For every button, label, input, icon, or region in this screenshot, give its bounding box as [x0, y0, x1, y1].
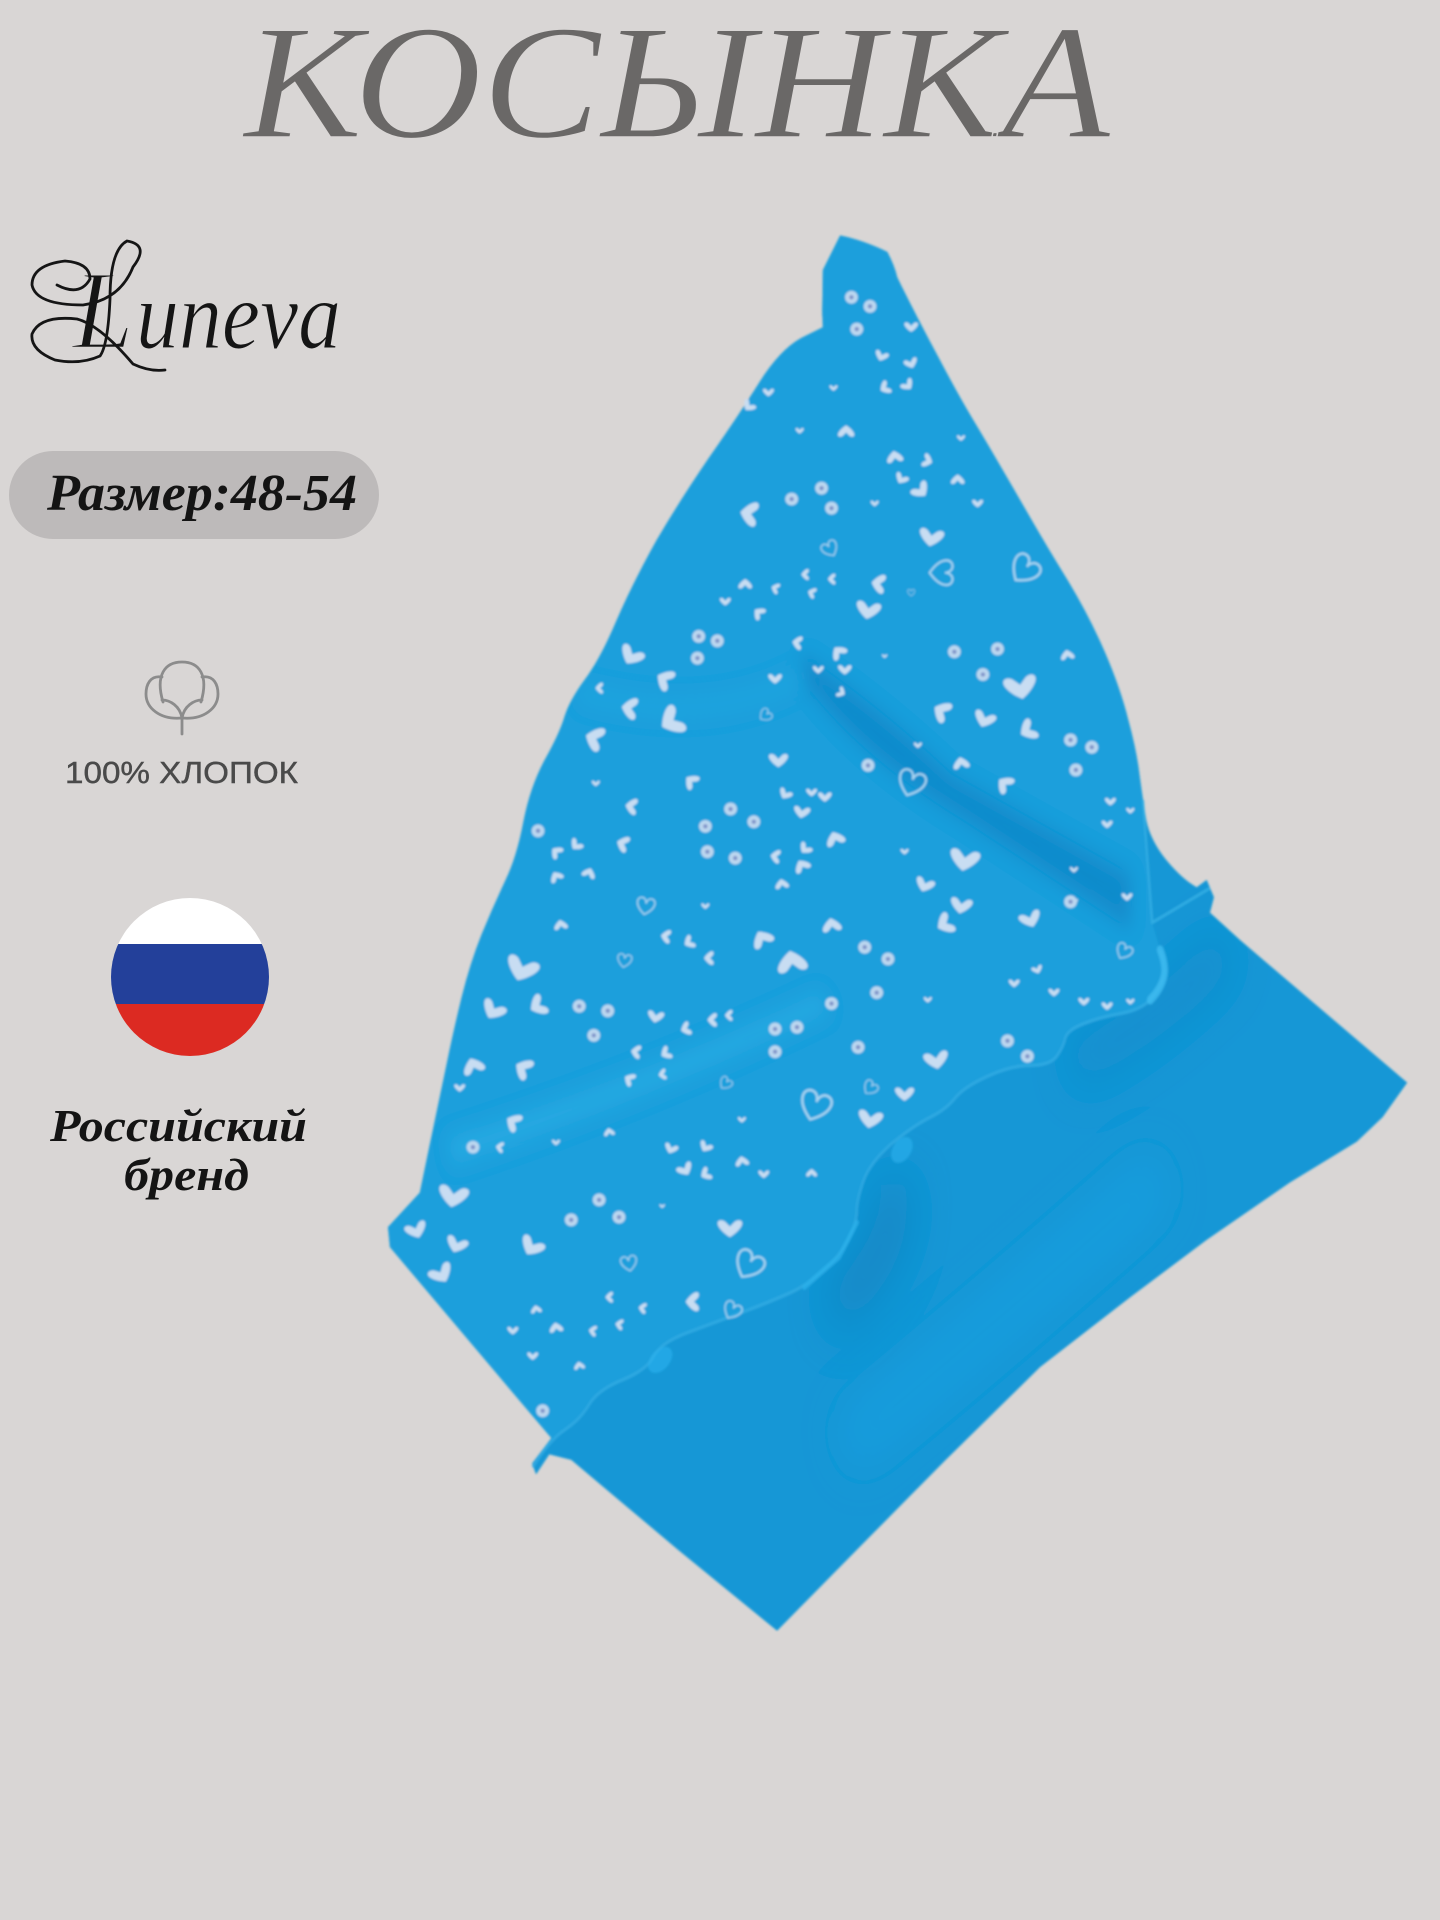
logo: Luneva: L	[70, 249, 134, 373]
brand text: бренд	[124, 1149, 249, 1200]
logo: Luneva	[32, 241, 341, 373]
fabric folds	[798, 656, 1130, 929]
hem stitching	[533, 950, 1165, 1467]
icon: russian flag	[111, 898, 269, 1056]
size pill: Размер:48-54	[46, 465, 357, 522]
printed panel	[380, 220, 1165, 1447]
brand text	[49, 1100, 307, 1200]
cotton label: 100% ХЛОПОК	[65, 755, 298, 790]
size pill	[9, 451, 379, 539]
product: blue headscarf	[380, 220, 1421, 1645]
logo: Luneva: uneva	[136, 263, 341, 369]
brand text: Российский	[49, 1100, 307, 1151]
icon: cotton	[146, 662, 218, 734]
heart print	[404, 322, 1134, 1370]
flower print	[467, 291, 1098, 1417]
solid band	[380, 220, 1421, 1645]
